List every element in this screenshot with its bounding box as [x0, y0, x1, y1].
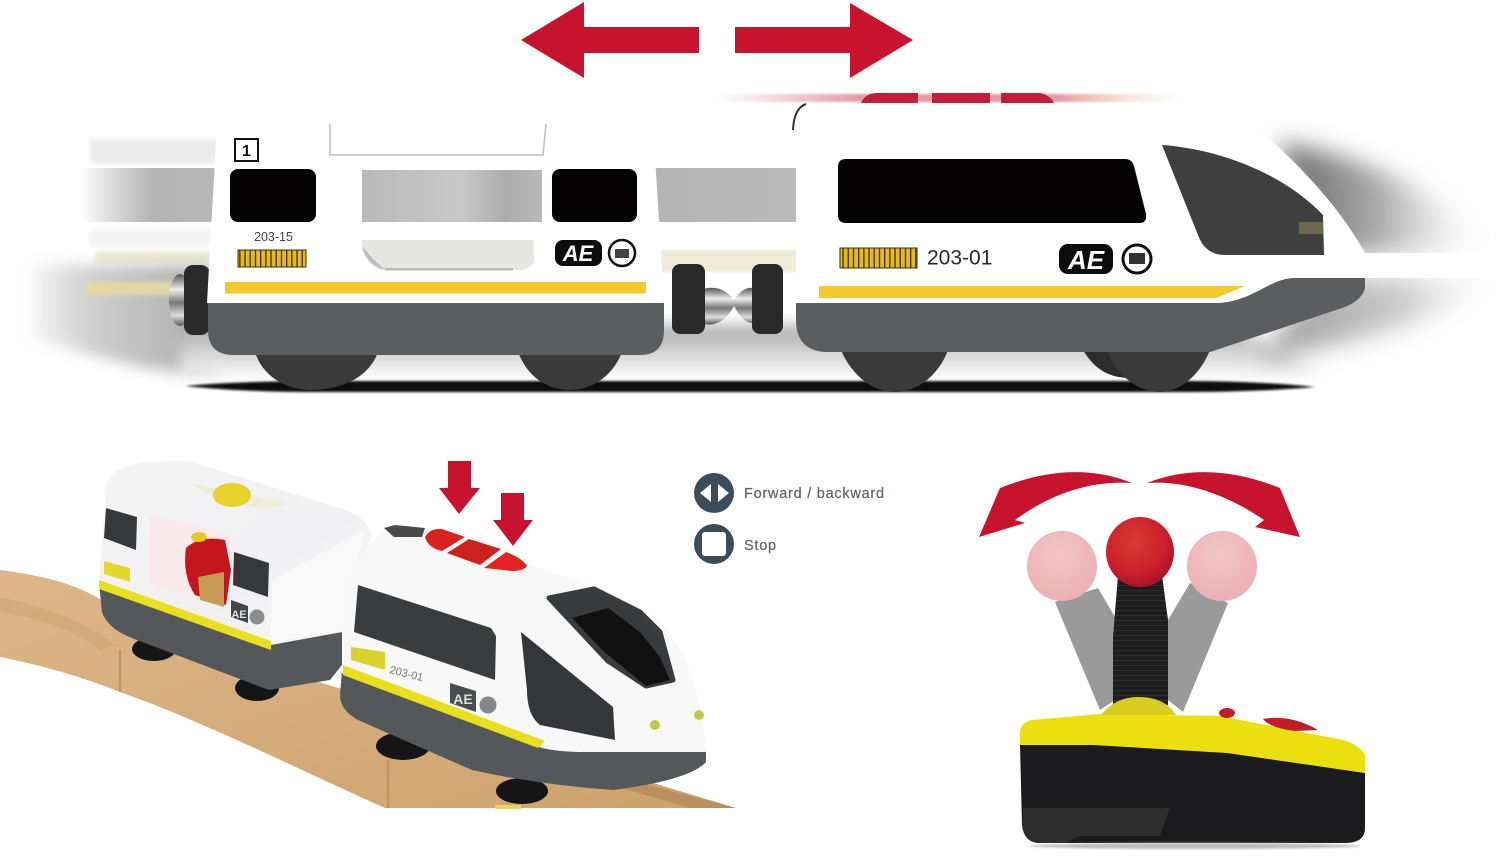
- label: forward backward: Forward / backward: [744, 486, 885, 502]
- base lower panel: [1023, 808, 1170, 843]
- roof hatch: [384, 525, 425, 537]
- long side window: [838, 159, 1146, 223]
- AE logo: AE: [231, 609, 247, 621]
- AE logo: AE: [562, 241, 595, 266]
- train emblem: [609, 240, 635, 266]
- top train: rear carriage: [169, 123, 664, 390]
- barcode: [104, 561, 130, 582]
- center magnetic coupler: [672, 264, 783, 334]
- arrow: move backward: [521, 2, 699, 78]
- ghost ball left: [1027, 531, 1097, 601]
- small train: rear carriage: [99, 461, 371, 701]
- black base: [1020, 744, 1365, 843]
- ghost stick left: [1055, 588, 1115, 710]
- yellow stripe: [225, 282, 646, 294]
- locomotive body: [796, 103, 1365, 280]
- headlights: [650, 710, 704, 730]
- small train: locomotive: [340, 525, 706, 804]
- carriage chassis: [208, 300, 664, 355]
- locomotive code text: 203-01: [927, 246, 992, 270]
- carriage number badge: [235, 139, 258, 161]
- yellow code bar: [840, 248, 917, 268]
- center ball: [1106, 517, 1174, 587]
- yellow stripe: [99, 580, 271, 650]
- red buttons: [1219, 708, 1318, 731]
- side opening with figure: [149, 513, 231, 607]
- AE logo: AE: [1067, 245, 1105, 275]
- white side panel: [271, 530, 365, 641]
- carriage chassis: [99, 583, 342, 690]
- ghost stick right: [1168, 583, 1228, 712]
- rear carriage windows: [230, 169, 637, 222]
- carriage body: [207, 123, 664, 303]
- label: stop: Stop: [744, 538, 777, 554]
- icon: forward backward: [694, 473, 734, 513]
- locomotive chassis: [796, 278, 1365, 352]
- AE logo: AE: [453, 691, 473, 707]
- emblem: [480, 696, 496, 714]
- AE logo: [555, 240, 602, 266]
- cab detail: [1299, 222, 1323, 234]
- roof opening: [189, 483, 287, 510]
- arrow: joystick right: [1147, 472, 1300, 537]
- motion blur behind top train: [25, 94, 1500, 392]
- ghost ball right: [1187, 531, 1257, 601]
- base shadow: [1030, 843, 1360, 849]
- wooden track: [0, 570, 736, 809]
- carriage number badge: 1: [242, 143, 251, 160]
- legend: [694, 473, 885, 564]
- windshield inner glass: [572, 608, 670, 686]
- carriage body: [99, 461, 371, 650]
- carriage code text: 203-15: [254, 230, 293, 244]
- arrow: press first button: [439, 461, 480, 514]
- side window: [354, 585, 496, 680]
- AE logo: [231, 600, 248, 623]
- left coupler: [169, 265, 210, 335]
- icon: stop: [694, 524, 734, 564]
- front side window: [521, 632, 615, 740]
- barcode: [351, 647, 385, 670]
- chassis: [340, 670, 706, 790]
- roof buttons: [861, 93, 1054, 103]
- windshield: [1162, 145, 1324, 255]
- yellow stripe: [343, 665, 545, 748]
- windows: [104, 508, 269, 597]
- joystick controller: [1020, 517, 1365, 849]
- code text: 203-01: [388, 664, 424, 684]
- top train: locomotive: [793, 93, 1365, 392]
- windshield: [549, 589, 673, 686]
- wheels: [132, 637, 279, 701]
- center stick: [1113, 575, 1168, 705]
- carriage opening: [330, 123, 546, 270]
- red buttons: [425, 529, 527, 571]
- arrow: move forward: [735, 3, 913, 78]
- yellow top: [1020, 714, 1365, 773]
- wheels: [376, 732, 548, 804]
- emblem: [250, 610, 264, 624]
- body: [342, 528, 706, 752]
- train emblem: [1123, 245, 1151, 273]
- yellow stripe: [819, 286, 1245, 298]
- yellow code bar: [238, 250, 306, 267]
- AE logo: [1059, 244, 1113, 275]
- wheels: [255, 352, 622, 390]
- dome: [1101, 697, 1176, 715]
- locomotive wheels: [841, 350, 1210, 392]
- arrow: joystick left: [979, 472, 1132, 537]
- arrow: press second button: [493, 493, 533, 546]
- AE logo: [450, 683, 476, 712]
